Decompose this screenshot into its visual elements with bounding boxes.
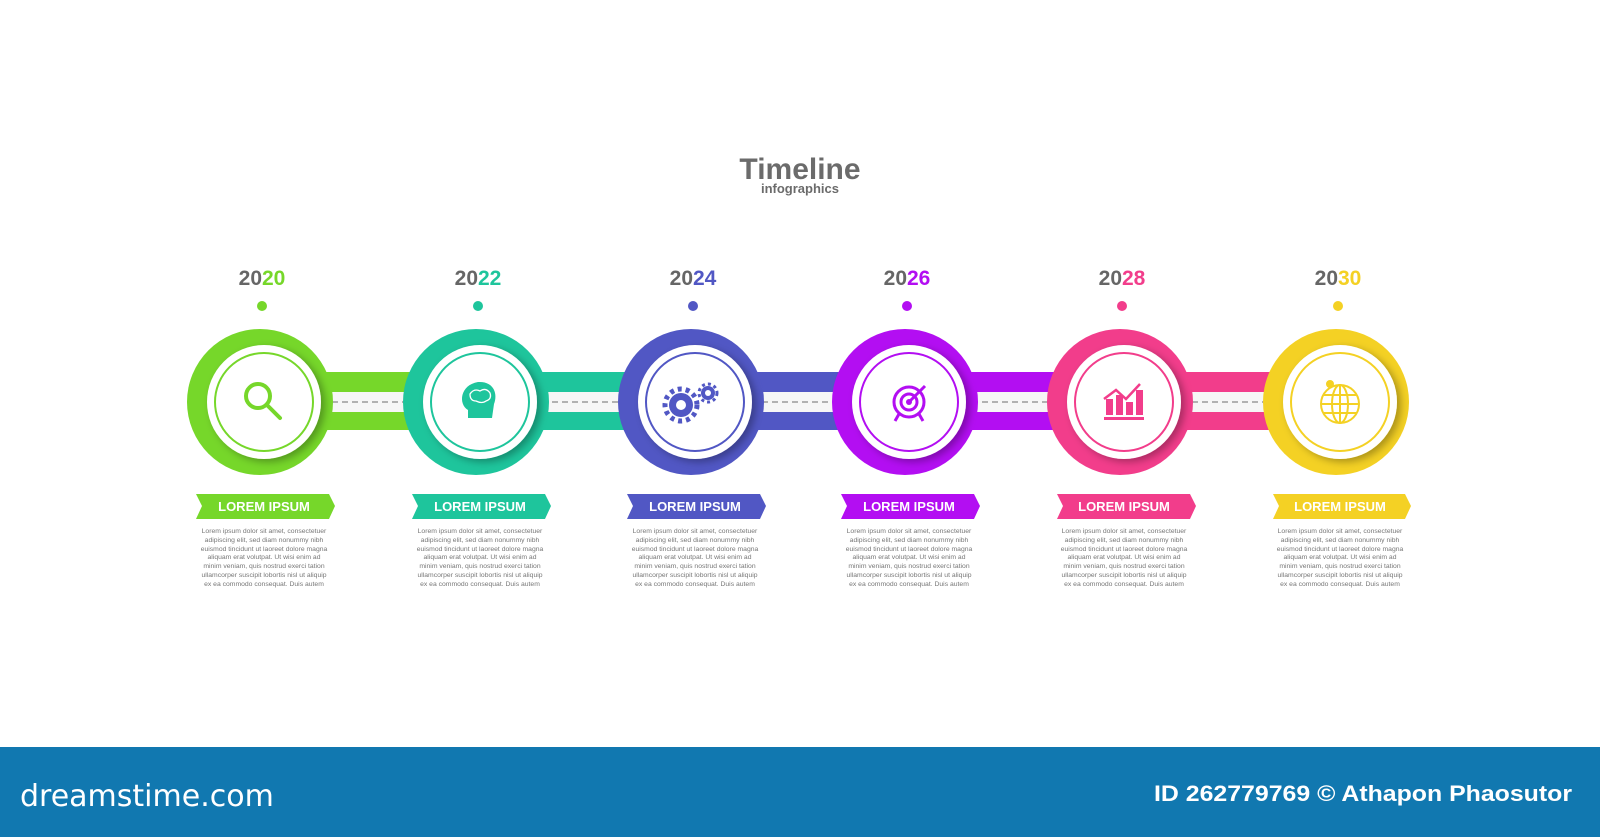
text block 5: euismod tincidunt ut laoreet dolore magna [1061, 546, 1187, 553]
step 5: 2028: LOREM IPSUM [1078, 499, 1170, 514]
text block 2: ex ea commodo consequat. Duis autem [420, 581, 540, 588]
step 2: 2022: 2022 [455, 267, 501, 290]
text block 1 [201, 528, 328, 588]
text block 1: euismod tincidunt ut laoreet dolore magna [201, 546, 327, 553]
text block 1: minim veniam, quis nostrud exerci tation [203, 563, 325, 570]
text block 4: Lorem ipsum dolor sit amet, consectetuer [847, 528, 971, 535]
text block 4: adipiscing elit, sed diam nonummy nibh [850, 537, 968, 544]
step 1: 2020: LOREM IPSUM [218, 499, 310, 514]
text block 3: Lorem ipsum dolor sit amet, consectetuer [633, 528, 757, 535]
text block 6: ex ea commodo consequat. Duis autem [1280, 581, 1400, 588]
text block 3: adipiscing elit, sed diam nonummy nibh [636, 537, 754, 544]
text block 2: ullamcorper suscipit lobortis nisl ut aliquip [417, 572, 543, 579]
text block 5: ex ea commodo consequat. Duis autem [1064, 581, 1184, 588]
text block 6: ullamcorper suscipit lobortis nisl ut aliquip [1277, 572, 1403, 579]
text block 3: euismod tincidunt ut laoreet dolore magna [632, 546, 758, 553]
text block 6: adipiscing elit, sed diam nonummy nibh [1281, 537, 1399, 544]
icon: head with brain [462, 382, 495, 418]
icon: target [894, 386, 925, 421]
step 1: 2020: 2020 [239, 267, 285, 290]
text block 2: Lorem ipsum dolor sit amet, consectetuer [418, 528, 542, 535]
step 3: 2024: LOREM IPSUM [649, 499, 741, 514]
icon: gears [665, 384, 717, 421]
text block 6: euismod tincidunt ut laoreet dolore magna [1277, 546, 1403, 553]
text block 5: ullamcorper suscipit lobortis nisl ut aliquip [1061, 572, 1187, 579]
text block 3: aliquam erat volutpat. Ut wisi enim ad [639, 554, 751, 561]
text block 5: minim veniam, quis nostrud exerci tation [1063, 563, 1185, 570]
step 4: 2026 [832, 267, 980, 519]
label banner [412, 494, 551, 519]
text block 4: ullamcorper suscipit lobortis nisl ut aliquip [846, 572, 972, 579]
step 2: 2022 [403, 267, 551, 519]
step 4: 2026: 2026 [884, 267, 930, 290]
icon: bar chart [1104, 390, 1144, 420]
text block 2: euismod tincidunt ut laoreet dolore magna [417, 546, 543, 553]
text block 4 [846, 528, 972, 588]
step 5: 2028 [1047, 267, 1196, 519]
label banner [627, 494, 766, 519]
text block 1: ullamcorper suscipit lobortis nisl ut aliquip [201, 572, 327, 579]
text block 2: aliquam erat volutpat. Ut wisi enim ad [424, 554, 536, 561]
text block 1: adipiscing elit, sed diam nonummy nibh [205, 537, 323, 544]
step 1: 2020 [187, 267, 335, 519]
text block 1: aliquam erat volutpat. Ut wisi enim ad [208, 554, 320, 561]
text block 4: euismod tincidunt ut laoreet dolore magna [846, 546, 972, 553]
step 3: 2024: 2024 [670, 267, 717, 290]
step 4: 2026: LOREM IPSUM [863, 499, 955, 514]
text block 3: ullamcorper suscipit lobortis nisl ut aliquip [632, 572, 758, 579]
text block 3: ex ea commodo consequat. Duis autem [635, 581, 755, 588]
connector bars [262, 372, 1338, 430]
step 6: 2030: LOREM IPSUM [1294, 499, 1386, 514]
step 6: 2030 [1263, 267, 1411, 519]
text block 2 [417, 528, 544, 588]
label banner [841, 494, 980, 519]
text block 2: adipiscing elit, sed diam nonummy nibh [421, 537, 539, 544]
text block 6 [1277, 528, 1404, 588]
icon: magnifier [246, 384, 280, 418]
text block 5: Lorem ipsum dolor sit amet, consectetuer [1062, 528, 1186, 535]
text block 5: aliquam erat volutpat. Ut wisi enim ad [1068, 554, 1180, 561]
text block 1: Lorem ipsum dolor sit amet, consectetuer [202, 528, 326, 535]
step 6: 2030: 2030 [1315, 267, 1361, 290]
text block 3 [632, 528, 758, 588]
label banner [1057, 494, 1196, 519]
text block 6: aliquam erat volutpat. Ut wisi enim ad [1284, 554, 1396, 561]
footer band: ID 262779769 © Athapon Phaosutor [1154, 781, 1572, 806]
label banner [196, 494, 335, 519]
step 2: 2022: LOREM IPSUM [434, 499, 526, 514]
text block 4: minim veniam, quis nostrud exerci tation [848, 563, 970, 570]
step 5: 2028: 2028 [1099, 267, 1146, 290]
icon: globe [1321, 385, 1359, 423]
title: infographics [761, 181, 839, 196]
text block 4: ex ea commodo consequat. Duis autem [849, 581, 969, 588]
label banner [1273, 494, 1411, 519]
text block 1: ex ea commodo consequat. Duis autem [204, 581, 324, 588]
footer band: dreamstime.com [20, 779, 274, 814]
text block 5 [1061, 528, 1188, 588]
text block 3: minim veniam, quis nostrud exerci tation [634, 563, 756, 570]
text block 2: minim veniam, quis nostrud exerci tation [419, 563, 541, 570]
text block 6: minim veniam, quis nostrud exerci tation [1279, 563, 1401, 570]
footer band [0, 747, 1600, 837]
step 3: 2024 [618, 267, 766, 519]
text block 5: adipiscing elit, sed diam nonummy nibh [1065, 537, 1183, 544]
title: Timeline [739, 153, 861, 186]
text block 6: Lorem ipsum dolor sit amet, consectetuer [1278, 528, 1402, 535]
text block 4: aliquam erat volutpat. Ut wisi enim ad [853, 554, 965, 561]
